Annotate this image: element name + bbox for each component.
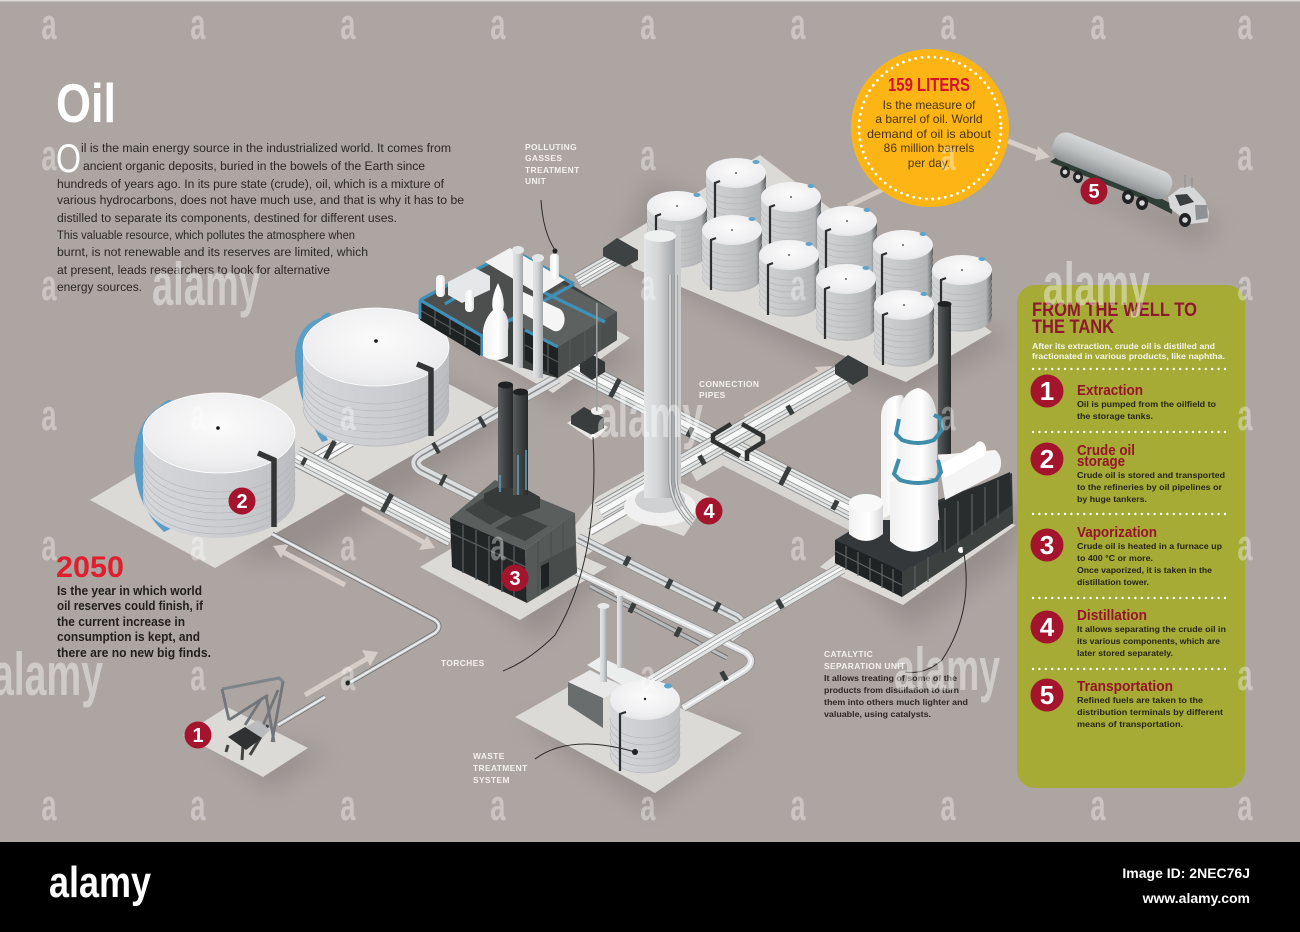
- pipes: product tanks to distillation: [600, 372, 845, 512]
- arrow: to furnace: [362, 508, 435, 550]
- 2050 callout: Is the year in which world: [57, 583, 202, 598]
- intro paragraph: burnt, is not renewable and its reserves are limited, which: [57, 245, 368, 259]
- intro paragraph: ancient organic deposits, buried in the bowels of the Earth since: [83, 159, 425, 173]
- watermark letters: a: [1237, 130, 1253, 180]
- step 1 extraction: Extraction: [1077, 383, 1143, 399]
- number badges: [184, 178, 1108, 748]
- truck cab: [1168, 175, 1209, 224]
- watermark letters: a: [640, 0, 656, 49]
- watermark letters: a: [490, 0, 506, 49]
- step 2 crude oil storage: Crude oil is stored and transported: [1077, 470, 1225, 480]
- pipes: loop to furnace: [416, 378, 558, 503]
- watermark letters: a: [790, 260, 806, 310]
- pipes: tanks to gas unit: [578, 252, 628, 281]
- step 5 transportation: means of transportation.: [1077, 719, 1183, 729]
- callout: 159 liters: per day.: [908, 156, 950, 170]
- plate: storage tanks and crude oil: [90, 338, 495, 568]
- watermark letters: a: [340, 0, 356, 49]
- watermark letters: a: [490, 780, 506, 830]
- watermark letters: a: [790, 780, 806, 830]
- badge 1: 1: [192, 725, 204, 747]
- watermark letters: a: [790, 520, 806, 570]
- step 5 transportation: [1030, 678, 1223, 729]
- watermark logos: alamy: [152, 251, 260, 318]
- waste treatment unit: [568, 590, 680, 773]
- badge 5: 5: [1088, 181, 1100, 203]
- badge 5: [1080, 178, 1108, 204]
- watermark letters: a: [1237, 390, 1253, 440]
- watermark letters: a: [41, 130, 57, 180]
- label: torches: TORCHES: [441, 658, 485, 668]
- label: catalytic separation: It allows treating of some of the: [824, 673, 957, 683]
- watermark letters: a: [190, 650, 206, 700]
- arrow: barrel line: [848, 186, 890, 206]
- clamp near gas unit: [580, 355, 605, 380]
- 2050 callout: oil reserves could finish, if: [57, 598, 204, 613]
- storage tank 2: [134, 393, 295, 538]
- truck tank: [1048, 129, 1176, 203]
- arrow: connection pipes: [745, 366, 832, 417]
- watermark logos: alamy: [1043, 251, 1150, 318]
- 2050 callout: there are no new big finds.: [57, 645, 211, 660]
- badge 3: [502, 564, 528, 592]
- plate: product tanks: [618, 155, 992, 382]
- step 2 crude oil storage: to the refineries by oil pipelines or: [1077, 482, 1223, 492]
- oil well pump: [222, 678, 284, 760]
- badge 2: [228, 488, 256, 514]
- pipes: furnace to waste: [573, 497, 842, 708]
- intro paragraph: This valuable resource, which pollutes the atmosphere when: [57, 228, 355, 242]
- step 4 distillation: its various components, which are: [1077, 636, 1220, 646]
- watermark letters: a: [340, 520, 356, 570]
- label: waste treatment: WASTE: [473, 751, 505, 761]
- callout: 159 liters: a barrel of oil. World: [875, 112, 983, 126]
- step 4 distillation: 4: [1040, 612, 1055, 642]
- watermark letters: a: [41, 780, 57, 830]
- watermark letters: a: [1237, 260, 1253, 310]
- watermark letters: a: [640, 780, 656, 830]
- 2050 callout: [56, 551, 211, 660]
- label: catalytic separation: [824, 649, 968, 719]
- label: connection pipes: CONNECTION: [699, 379, 759, 389]
- panel heading: [1032, 300, 1197, 338]
- label: waste treatment: [473, 751, 528, 785]
- watermark letters: a: [340, 780, 356, 830]
- step 3 vaporization: Once vaporized, it is taken in the: [1077, 565, 1212, 575]
- step 5 transportation: Transportation: [1077, 679, 1173, 695]
- watermark letters: a: [1237, 650, 1253, 700]
- label: catalytic separation: them into others much lighter and: [824, 697, 968, 707]
- panel heading: FROM THE WELL TO: [1032, 300, 1197, 321]
- title: Oil: [56, 72, 116, 134]
- watermark letters: a: [640, 650, 656, 700]
- watermark letters: a: [1237, 520, 1253, 570]
- step 2 crude oil storage: [1030, 442, 1225, 504]
- label: polluting gasses: GASSES: [525, 153, 562, 163]
- step 5 transportation: distribution terminals by different: [1077, 707, 1223, 717]
- label: polluting gasses: POLLUTING: [525, 142, 577, 152]
- footer logo: alamy: [49, 858, 151, 907]
- watermark letters: a: [640, 260, 656, 310]
- leader: waste system: [535, 744, 635, 759]
- badge 2: 2: [236, 491, 248, 513]
- panel intro: After its extraction, crude oil is distilled and: [1032, 341, 1215, 351]
- watermark logos: [0, 251, 1150, 708]
- watermark letters: a: [41, 520, 57, 570]
- badge 3: 3: [509, 568, 521, 590]
- label: catalytic separation: SEPARATION UNIT: [824, 661, 906, 671]
- step 3 vaporization: to 400 °C or more.: [1077, 553, 1153, 563]
- label: waste treatment: SYSTEM: [473, 775, 510, 785]
- badge 1: [184, 722, 212, 748]
- step 5 transportation: 5: [1040, 680, 1054, 710]
- watermark letters: a: [1090, 0, 1106, 49]
- waste leader dot: [632, 749, 638, 755]
- label: waste treatment: TREATMENT: [473, 763, 528, 773]
- product storage tanks: [647, 158, 992, 367]
- step 1 extraction: Oil is pumped from the oilfield to: [1077, 399, 1216, 409]
- footer image id: Image ID: 2NEC76J: [1122, 865, 1250, 881]
- tank 1 blue stairs: [295, 312, 331, 442]
- step 1 extraction: [1030, 374, 1216, 421]
- watermark letters: a: [190, 520, 206, 570]
- watermark letters: a: [190, 780, 206, 830]
- watermark logos: alamy: [894, 636, 1000, 703]
- step 1 extraction: 1: [1040, 376, 1054, 406]
- label: polluting gasses: TREATMENT: [525, 165, 580, 175]
- storage tank 1: [295, 308, 449, 447]
- watermark letters: a: [1237, 780, 1253, 830]
- watermark letters: a: [41, 0, 57, 49]
- leader: catalytic unit: [905, 548, 966, 672]
- callout: 159 liters: 159 LITERS: [888, 75, 970, 95]
- step 1 extraction: the storage tanks.: [1077, 411, 1153, 421]
- watermark logos: alamy: [597, 383, 703, 450]
- badge 4: 4: [703, 501, 715, 523]
- plate: well: [183, 707, 308, 777]
- callout: 159 liters: demand of oil is about: [867, 127, 992, 141]
- 2050 number: 2050: [56, 551, 124, 584]
- truck chassis: [1050, 152, 1172, 214]
- step 3 vaporization: Vaporization: [1077, 525, 1157, 541]
- panel: from the well to the tank: [1017, 285, 1245, 788]
- arrow: to storage tank: [273, 544, 345, 585]
- footer url: www.alamy.com: [1142, 890, 1250, 906]
- watermark letters: a: [940, 130, 956, 180]
- panel intro: [1032, 341, 1225, 361]
- watermark letters: a: [340, 390, 356, 440]
- tanker truck: [1048, 129, 1209, 227]
- label: polluting gasses: [525, 142, 580, 186]
- watermark letters: a: [640, 130, 656, 180]
- label: catalytic separation: CATALYTIC: [824, 649, 873, 659]
- callout: 159 liters: Is the measure of: [883, 98, 976, 112]
- plate: furnace: [420, 520, 607, 620]
- panel intro: fractionated in various products, like naphtha.: [1032, 351, 1225, 361]
- tank 2 blue stairs: [134, 400, 172, 532]
- clamp box near tanks: [835, 355, 868, 385]
- flow arrows: [273, 141, 1050, 695]
- pipe clamp crossing: [713, 424, 763, 461]
- catalytic separation unit: [835, 301, 1013, 597]
- ground shadows: [210, 180, 1220, 810]
- intro paragraph: at present, leads researchers to look for alternative: [57, 263, 330, 277]
- step 4 distillation: later stored separately.: [1077, 648, 1173, 658]
- intro paragraph: distilled to separate its components, destined for different uses.: [57, 211, 397, 225]
- leader: torches: [503, 437, 594, 671]
- intro paragraph: energy sources.: [57, 280, 142, 294]
- label: connection pipes: [699, 379, 759, 400]
- step 4 distillation: Distillation: [1077, 608, 1147, 624]
- distillation tower: [624, 225, 696, 526]
- watermark letters: a: [190, 390, 206, 440]
- gas treatment unit: [420, 246, 617, 378]
- intro paragraph: [56, 137, 464, 294]
- watermark letters: a: [490, 520, 506, 570]
- step 2 crude oil storage: Crude oil: [1077, 443, 1135, 459]
- watermark letters: a: [41, 260, 57, 310]
- step 2 crude oil storage: by huge tankers.: [1077, 494, 1147, 504]
- 2050 callout: the current increase in: [57, 614, 185, 629]
- clamp box by product plate: [603, 238, 638, 267]
- watermark letters: a: [41, 390, 57, 440]
- step 2 crude oil storage: 2: [1040, 444, 1054, 474]
- watermark letters: a: [940, 0, 956, 49]
- small torch unit: [567, 303, 608, 440]
- pipes: well line: [272, 534, 439, 725]
- watermark letters: a: [340, 650, 356, 700]
- step 3 vaporization: Crude oil is heated in a furnace up: [1077, 541, 1222, 551]
- plate: connection road strips: [690, 380, 858, 520]
- intro paragraph: various hydrocarbons, does not have much use, and that is why it has to be: [57, 193, 464, 207]
- panel heading: THE TANK: [1032, 317, 1114, 338]
- label: catalytic separation: valuable, using catalysts.: [824, 709, 931, 719]
- watermark letters: a: [1237, 0, 1253, 49]
- footer bar: [0, 842, 1300, 932]
- pipes: gas unit to catalytic unit: [572, 366, 860, 514]
- intro paragraph: il is the main energy source in the industrialized world. It comes from: [81, 141, 451, 155]
- plate: waste unit: [515, 673, 742, 793]
- watermark letters: a: [940, 780, 956, 830]
- label: polluting gasses: UNIT: [525, 176, 547, 186]
- arrow: well to storage: [305, 650, 378, 695]
- watermark letters: a: [790, 0, 806, 49]
- arrow: tanks to truck: [1008, 141, 1050, 161]
- watermark letters: a: [190, 0, 206, 49]
- leader lines: [503, 200, 966, 759]
- plate: gas treatment unit: [420, 262, 630, 393]
- furnace: [450, 382, 577, 603]
- drop cap: O: [56, 137, 81, 181]
- watermark letters: a: [1090, 780, 1106, 830]
- 2050 callout: consumption is kept, and: [57, 629, 200, 644]
- callout: 159 liters: [851, 49, 1009, 207]
- step 3 vaporization: [1030, 525, 1222, 587]
- label: connection pipes: PIPES: [699, 390, 726, 400]
- step 3 vaporization: 3: [1040, 530, 1054, 560]
- callout: 159 liters: 86 million barrels: [884, 141, 974, 155]
- step 4 distillation: [1030, 608, 1226, 658]
- leader: polluting gases: [541, 200, 555, 250]
- step 4 distillation: It allows separating the crude oil in: [1077, 624, 1226, 634]
- step 3 vaporization: distillation tower.: [1077, 577, 1149, 587]
- label: catalytic separation: products from distillation to turn: [824, 685, 959, 695]
- step 2 crude oil storage: storage: [1077, 454, 1125, 470]
- plate: catalytic unit: [820, 498, 1016, 605]
- plate: distillation road: [560, 468, 710, 560]
- pipes: tank to furnace: [296, 440, 452, 537]
- badge 4: [696, 498, 722, 524]
- step 5 transportation: Refined fuels are taken to the: [1077, 695, 1203, 705]
- watermark letters: a: [940, 390, 956, 440]
- intro paragraph: hundreds of years ago. In its pure state (crude), oil, which is a mixture of: [57, 177, 445, 191]
